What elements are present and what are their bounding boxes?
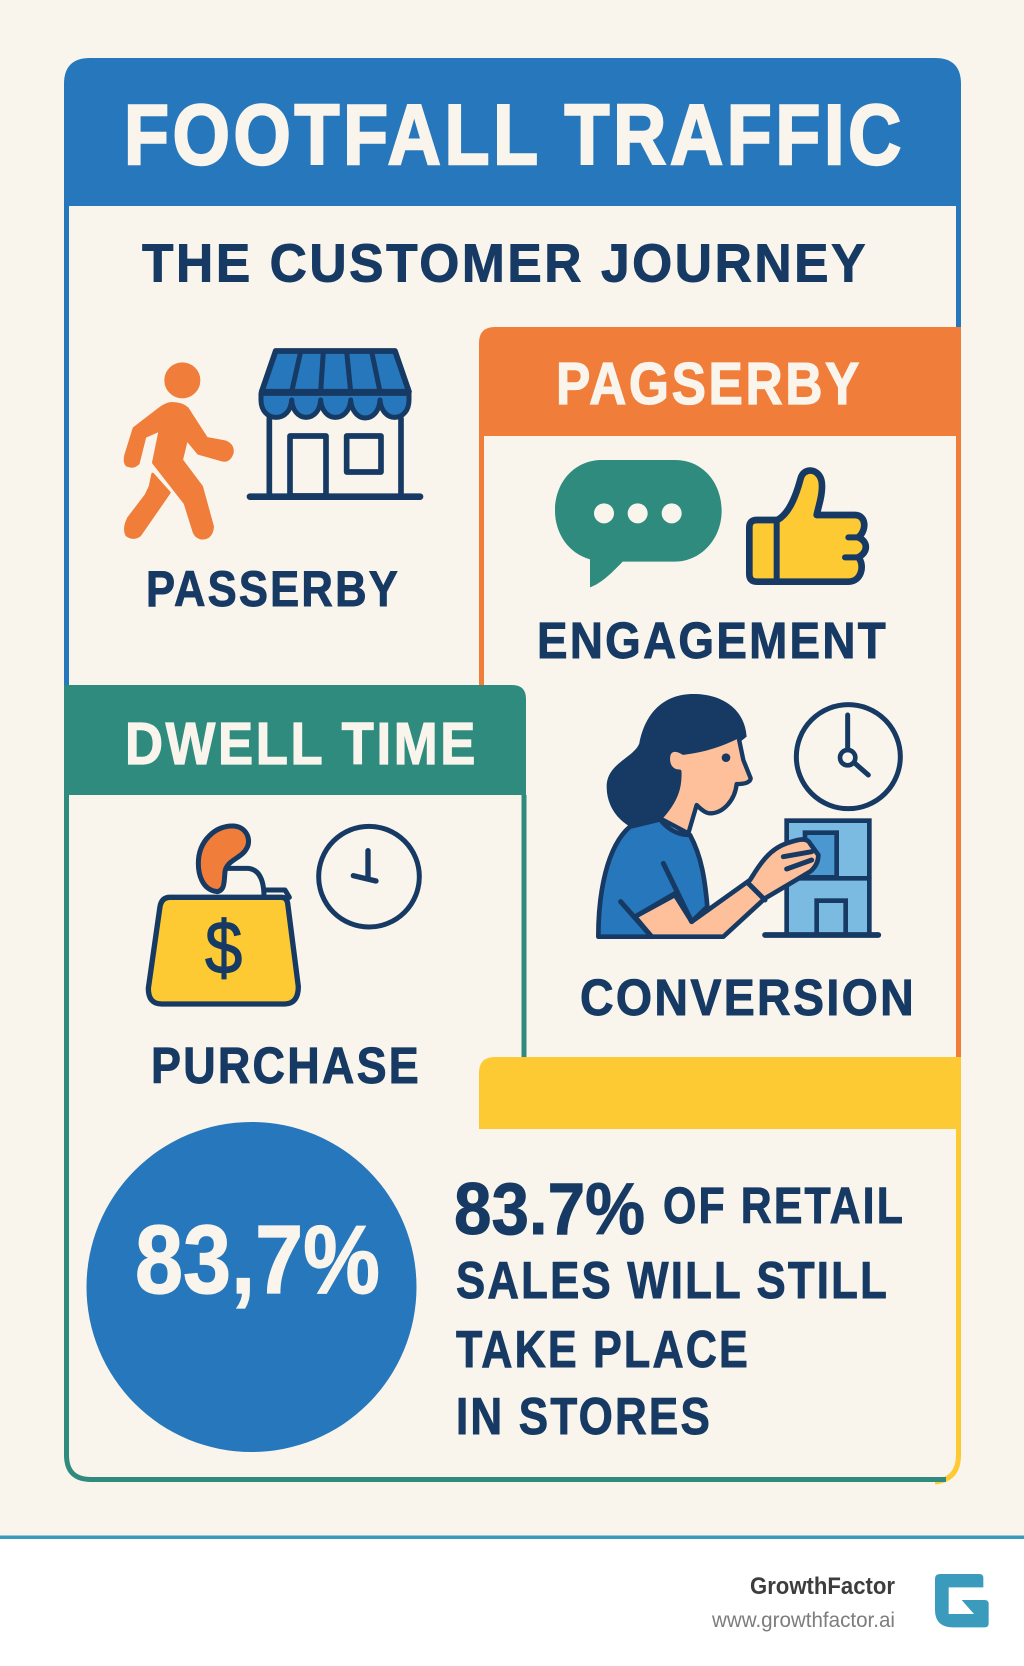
icon: clock [319, 826, 419, 927]
icon: storefront [250, 351, 420, 497]
label: passerby: PASSERBY [146, 561, 400, 617]
stat description: OF RETAIL [663, 1177, 905, 1234]
label: engagement: ENGAGEMENT [537, 612, 888, 669]
label: conversion: CONVERSION [580, 969, 916, 1026]
stat description [454, 1169, 905, 1446]
website: www.growthfactor.ai [711, 1609, 895, 1632]
clock [796, 705, 900, 809]
dollar sign: $ [205, 905, 242, 989]
stat description: SALES WILL STILL [456, 1252, 889, 1310]
woman [598, 694, 818, 937]
icon: thumbs up [749, 471, 866, 582]
label: purchase: PURCHASE [151, 1037, 421, 1094]
title: FOOTFALL TRAFFIC [124, 88, 905, 183]
stat description: IN STORES [456, 1388, 712, 1446]
footer [0, 1536, 1024, 1666]
panel outline: green left and bottom border [66, 795, 946, 1480]
icon: walking person [125, 364, 232, 538]
heading: dwell time: DWELL TIME [125, 711, 478, 777]
icon: speech bubble [555, 460, 722, 587]
stat description: TAKE PLACE [456, 1321, 750, 1379]
panel: main blue header [64, 58, 961, 685]
heading: pagserby: PAGSERBY [556, 351, 862, 417]
brand name: GrowthFactor [750, 1573, 895, 1600]
icon: clock and store with woman [598, 694, 900, 937]
panel: green dwell time header [64, 685, 526, 1057]
panel: orange passerby header [479, 327, 961, 1057]
subtitle: THE CUSTOMER JOURNEY [142, 234, 868, 294]
panel: yellow stat header [479, 1057, 961, 1482]
stat circle [86, 1122, 416, 1452]
icon: shopping bag [148, 826, 298, 1004]
icon: logo [935, 1574, 989, 1627]
stat value: 83,7% [135, 1205, 380, 1314]
stat description: 83.7% [454, 1169, 645, 1250]
small building [765, 821, 878, 935]
